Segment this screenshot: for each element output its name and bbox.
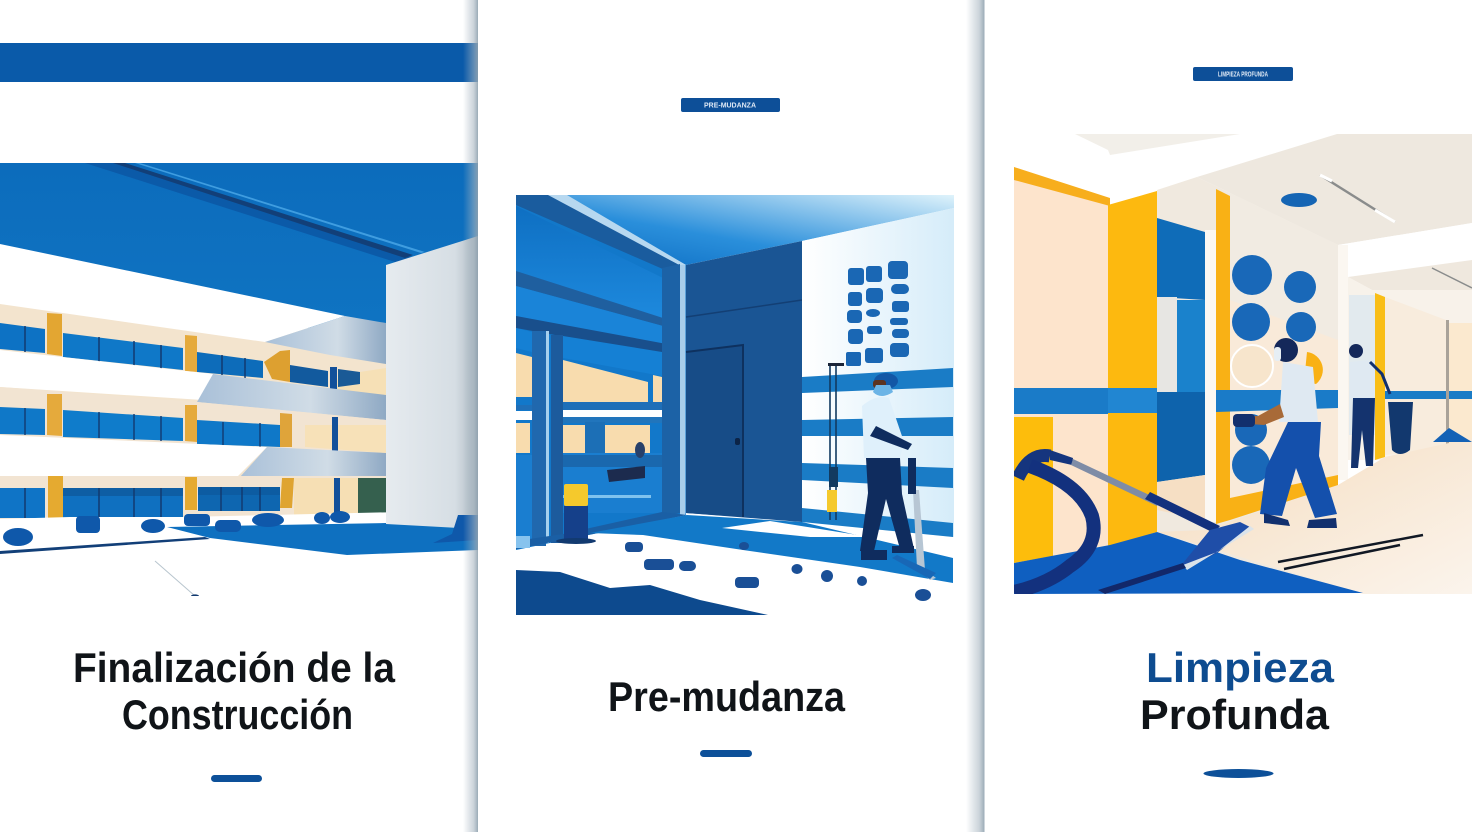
- wall-leaning mop: [827, 363, 844, 520]
- orange door jamb: [1216, 189, 1230, 524]
- background cleaner with bin: [1349, 344, 1472, 468]
- wall tile motif: [846, 261, 909, 366]
- illustration: empty interior with worker: [516, 195, 954, 615]
- accent bar: [211, 775, 262, 782]
- title: [1140, 644, 1335, 738]
- panel: Pre-mudanza: [516, 0, 984, 832]
- doorway: [1157, 218, 1205, 300]
- illustration: cleaners in yellow and blue hallway: [1014, 134, 1472, 594]
- rubble stones: [625, 542, 931, 601]
- vacuum hose and floor head: [1014, 450, 1254, 594]
- small label badge: LIMPIEZA PROFUNDA: [1218, 72, 1268, 78]
- panel edge shadow: [463, 0, 478, 832]
- title: Pre-mudanza: [608, 673, 846, 720]
- wall circles: [1232, 255, 1316, 484]
- accent bar: [1204, 769, 1274, 778]
- window wall: [516, 195, 687, 550]
- blue debris bags: [3, 511, 478, 546]
- accent bar: [700, 750, 752, 757]
- small label badge: PRE-MUDANZA: [704, 102, 756, 110]
- yellow bucket: [556, 484, 596, 544]
- title: [73, 644, 396, 738]
- worker with vacuum: [860, 373, 936, 580]
- far hallway: [1338, 223, 1472, 277]
- left wall: [1014, 167, 1110, 563]
- title: Profunda: [1140, 691, 1330, 738]
- wood floor: [1157, 438, 1472, 594]
- foreground cleaner: [1233, 338, 1337, 528]
- title: Construcción: [122, 691, 353, 738]
- panel: Finalización de la Construcción: [0, 0, 478, 832]
- small label badge: [1193, 67, 1293, 81]
- dark wall and door: [686, 241, 802, 522]
- illustration: modern building exterior: [0, 163, 478, 598]
- floor: [590, 515, 953, 583]
- title: Finalización de la: [73, 644, 396, 691]
- black floor lines: [1278, 535, 1423, 569]
- small label badge: [681, 98, 780, 112]
- panel: Limpieza Profunda: [1014, 67, 1472, 778]
- ceiling details: [1281, 175, 1472, 288]
- top banner bar: [0, 43, 478, 82]
- title: Limpieza: [1146, 644, 1335, 691]
- blue floor mat: [1014, 532, 1363, 594]
- blue wall band: [1216, 390, 1338, 412]
- panel edge shadow: [966, 0, 984, 832]
